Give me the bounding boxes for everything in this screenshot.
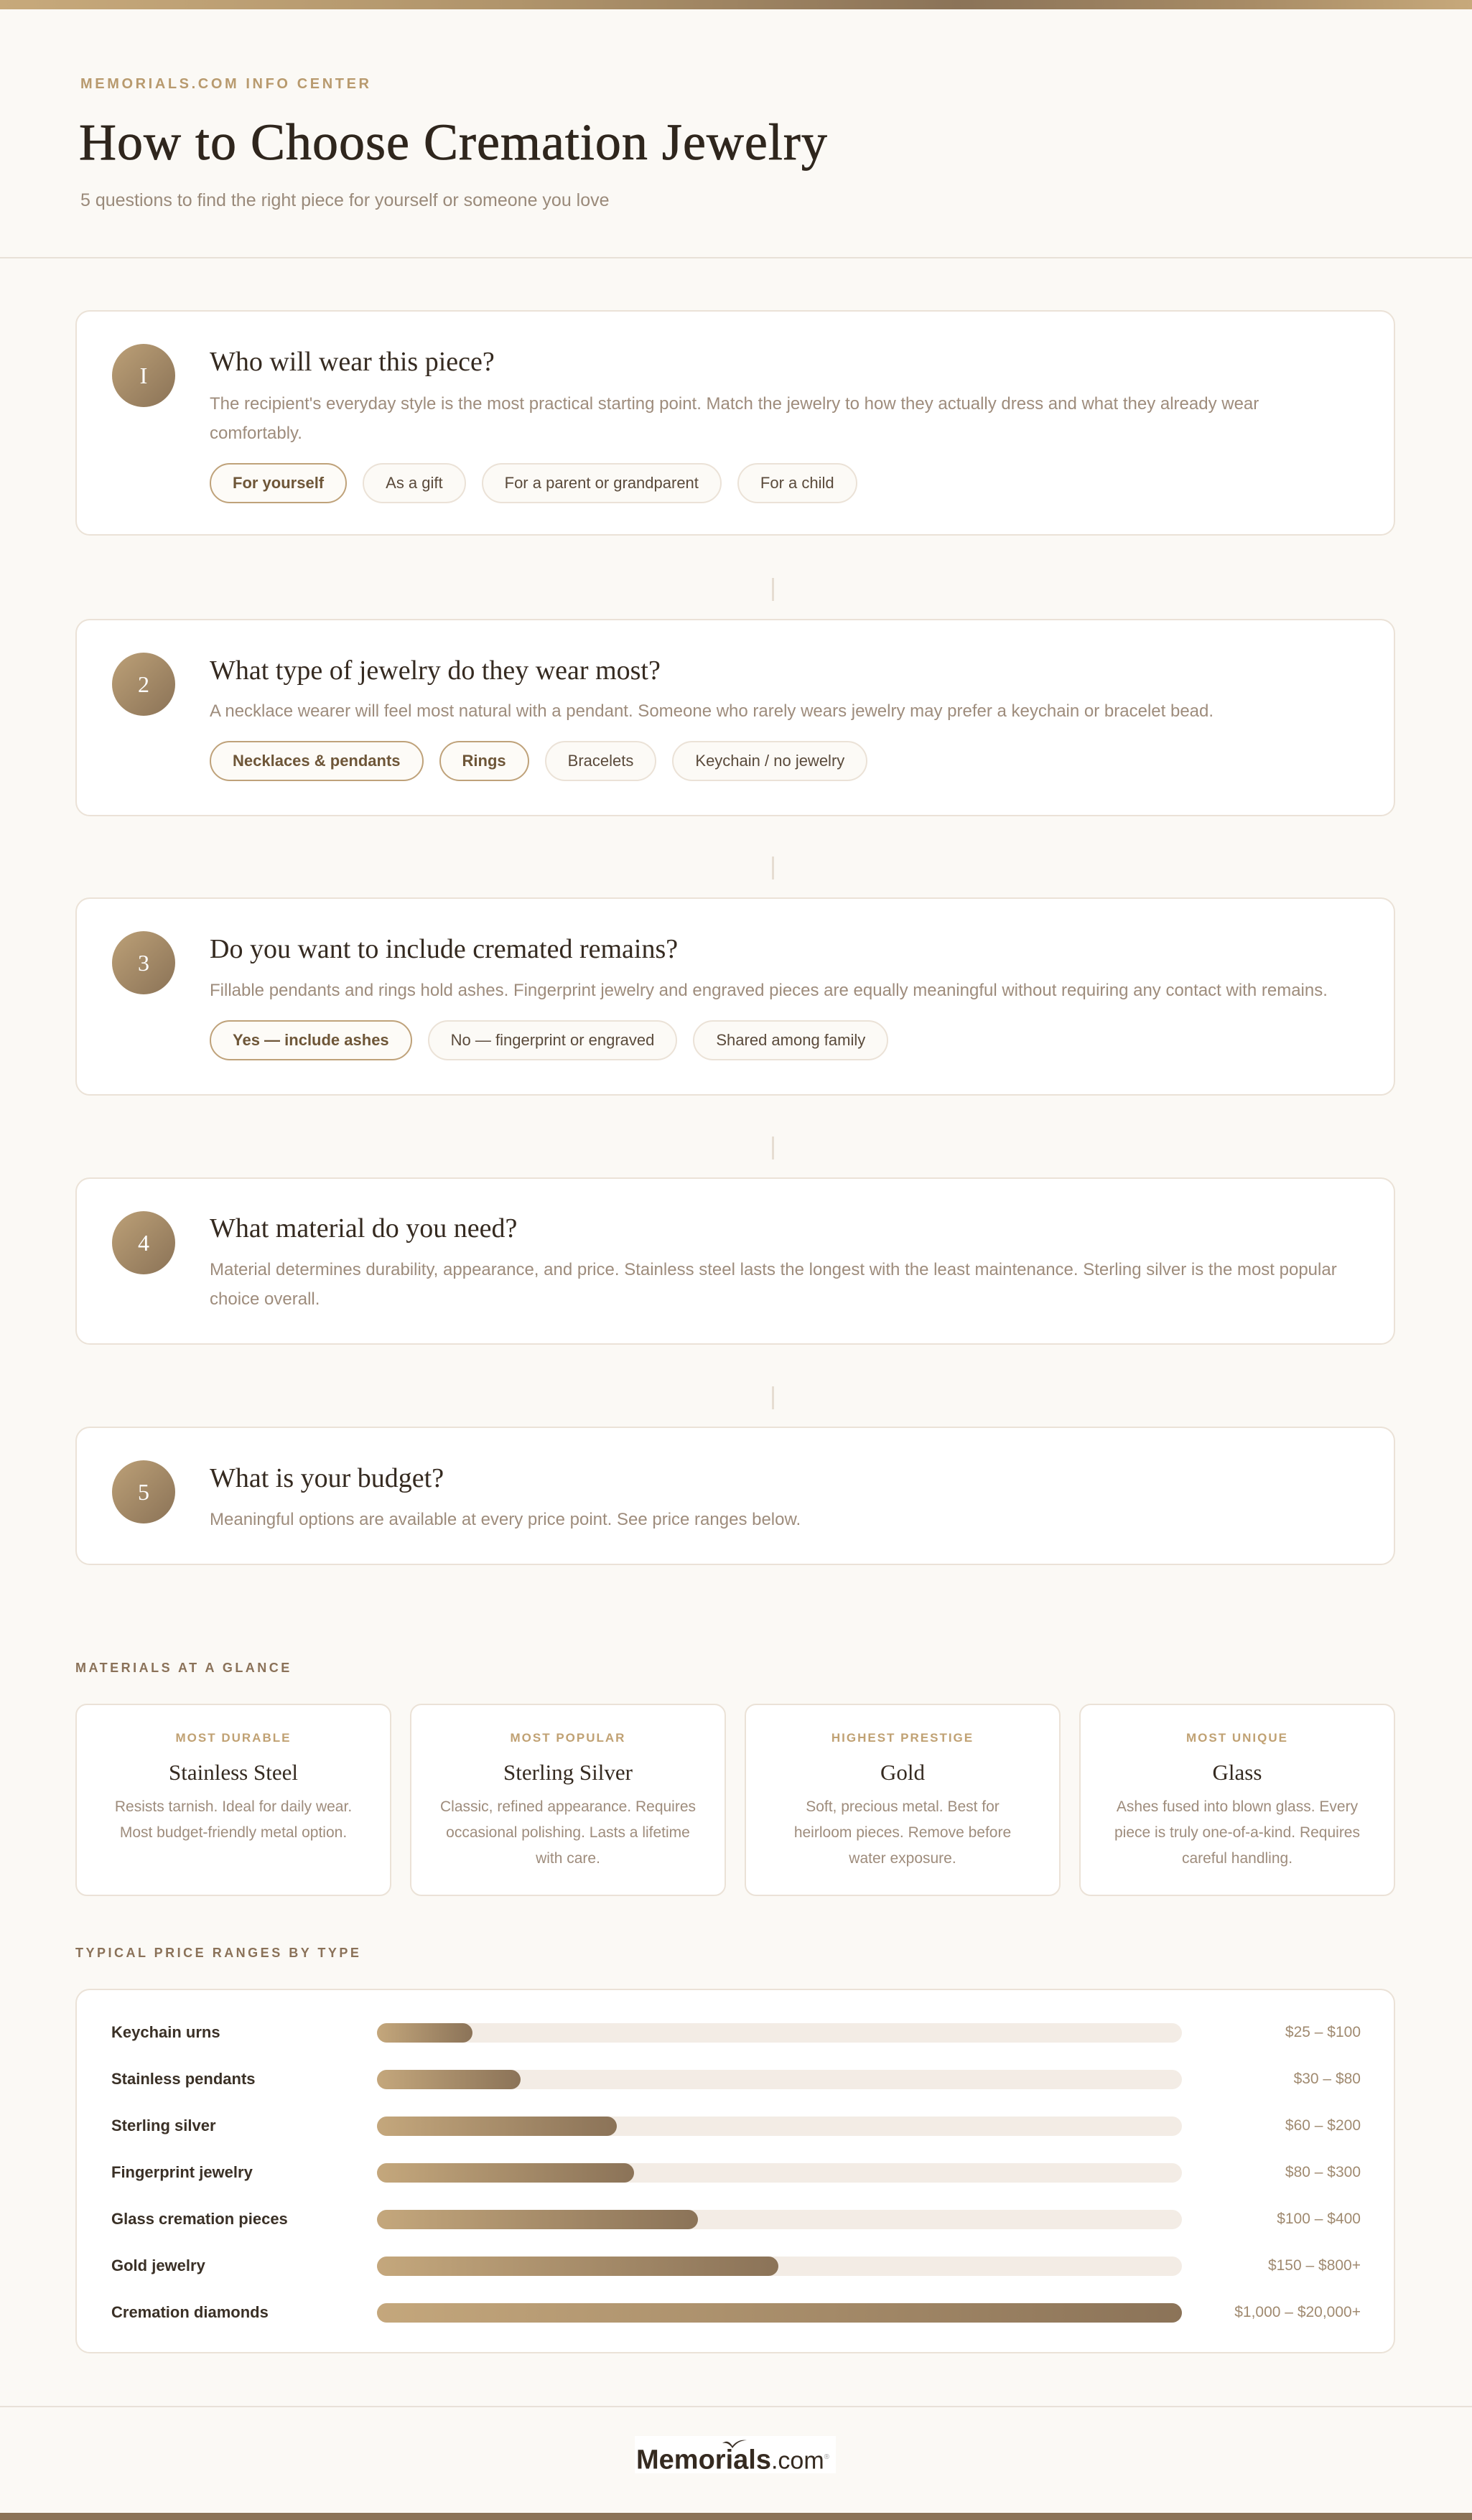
material: sterling silver: Sterling Silver (503, 1760, 633, 1785)
material: gold: Gold (880, 1760, 925, 1785)
bar: fingerprint: $80 – $300 (1285, 2164, 1361, 2180)
bar: fingerprint: Fingerprint jewelry (111, 2163, 253, 2181)
material: glass (1079, 1704, 1395, 1896)
card: question 4 (75, 1177, 1395, 1345)
bar: sterling: $60 – $200 (1285, 2117, 1361, 2134)
logo (635, 2436, 836, 2473)
icon: number 3 (112, 931, 175, 994)
heading q1: Who will wear this piece? (210, 347, 495, 377)
icon: number 4 (112, 1211, 175, 1274)
icon: number 5 (112, 1460, 175, 1523)
icon: number 2: 2 (138, 671, 149, 697)
bar: gold: Gold jewelry (111, 2257, 205, 2274)
options q3 (210, 1020, 888, 1060)
heading q3: Do you want to include cremated remains? (210, 934, 678, 964)
bar: glass (111, 2210, 1361, 2229)
logo: Memorials.com® (636, 2445, 829, 2475)
section label: prices: TYPICAL PRICE RANGES BY TYPE (75, 1946, 361, 1960)
options q3: Yes — include ashes (233, 1031, 389, 1049)
bar: gold: $150 – $800+ (1268, 2257, 1361, 2274)
text q3: Fillable pendants and rings hold ashes. Fingerprint jewelry and engraved pieces are equally meaningful without requiring any contact with remains. (210, 981, 1328, 1000)
card: question 2 (75, 619, 1395, 816)
icon: number 2 (112, 653, 175, 716)
card: question 5 (75, 1427, 1395, 1565)
text q4: Material determines durability, appearance, and price. Stainless steel lasts the longest with the least maintenance. Sterling silver is the most popular choice overall. (210, 1260, 1337, 1309)
material: sterling silver (410, 1704, 726, 1896)
options q1: For a parent or grandparent (505, 474, 699, 492)
bar: stainless: $30 – $80 (1294, 2071, 1361, 2087)
material: gold (745, 1704, 1061, 1896)
bottom accent bar (0, 2513, 1472, 2520)
text q2: A necklace wearer will feel most natural with a pendant. Someone who rarely wears jewelry may prefer a keychain or bracelet bead. (210, 701, 1214, 721)
heading q5: What is your budget? (210, 1463, 444, 1493)
material: sterling silver: MOST POPULAR (511, 1731, 625, 1745)
material: stainless steel (75, 1704, 391, 1896)
options q2: Keychain / no jewelry (695, 752, 844, 770)
section label: materials: MATERIALS AT A GLANCE (75, 1661, 292, 1675)
material: gold: Soft, precious metal. Best for heirloom pieces. Remove before water exposure. (794, 1798, 1011, 1867)
bar: sterling: Sterling silver (111, 2117, 216, 2134)
options q2: Necklaces & pendants (233, 752, 401, 770)
material: stainless steel: Stainless Steel (169, 1760, 298, 1785)
bar: diamonds: $1,000 – $20,000+ (1234, 2304, 1361, 2320)
options q2: Bracelets (568, 752, 633, 770)
options q3: Shared among family (716, 1031, 865, 1049)
material: glass: Glass (1213, 1760, 1262, 1785)
icon: number 5: 5 (138, 1479, 149, 1505)
material: glass: MOST UNIQUE (1186, 1731, 1288, 1745)
heading q2: What type of jewelry do they wear most? (210, 655, 661, 686)
title: How to Choose Cremation Jewelry (79, 113, 828, 171)
icon: number 1 (112, 344, 175, 407)
card: question 1 (75, 310, 1395, 536)
options q3: No — fingerprint or engraved (451, 1031, 654, 1049)
bar: diamonds (111, 2303, 1361, 2323)
bar: sterling (111, 2117, 1361, 2136)
icon: number 1: I (140, 363, 147, 388)
bar: diamonds: Cremation diamonds (111, 2303, 269, 2321)
connector (772, 578, 774, 601)
eyebrow label: MEMORIALS.COM INFO CENTER (80, 76, 372, 92)
bar: glass: Glass cremation pieces (111, 2210, 288, 2228)
options q2: Rings (462, 752, 506, 770)
heading q4: What material do you need? (210, 1213, 517, 1243)
bar: glass: $100 – $400 (1277, 2211, 1361, 2227)
top accent bar (0, 0, 1472, 9)
icon: bird (722, 2440, 747, 2448)
bar chart: price ranges (75, 1989, 1395, 2353)
options q1: For yourself (233, 474, 324, 492)
subtitle: 5 questions to find the right piece for yourself or someone you love (80, 190, 610, 210)
material: sterling silver: Classic, refined appearance. Requires occasional polishing. Lasts a lifetime with care. (440, 1798, 696, 1867)
connector (772, 1386, 774, 1409)
bar: keychain: Keychain urns (111, 2023, 220, 2041)
material: stainless steel: Resists tarnish. Ideal for daily wear. Most budget-friendly metal option. (115, 1798, 352, 1841)
connector (772, 1137, 774, 1159)
bar: keychain (111, 2023, 1361, 2043)
options q1: For a child (760, 474, 834, 492)
material: gold: HIGHEST PRESTIGE (832, 1731, 974, 1745)
text q5: Meaningful options are available at every price point. See price ranges below. (210, 1510, 801, 1529)
bar: keychain: $25 – $100 (1285, 2024, 1361, 2040)
options q1: As a gift (386, 474, 443, 492)
connector (772, 857, 774, 879)
icon: number 4: 4 (138, 1230, 149, 1256)
bar: fingerprint (111, 2163, 1361, 2183)
options q1 (210, 463, 857, 503)
card: question 3 (75, 897, 1395, 1096)
options q2 (210, 741, 867, 781)
material: stainless steel: MOST DURABLE (176, 1731, 291, 1745)
icon: number 3: 3 (138, 950, 149, 976)
bar: stainless: Stainless pendants (111, 2070, 256, 2088)
text q1: The recipient's everyday style is the most practical starting point. Match the jewelry to how they actually dress and what they already wear comfortably. (210, 394, 1259, 443)
material: glass: Ashes fused into blown glass. Every piece is truly one-of-a-kind. Requires careful handling. (1114, 1798, 1360, 1867)
bar: gold (111, 2257, 1361, 2276)
bar: stainless (111, 2070, 1361, 2089)
